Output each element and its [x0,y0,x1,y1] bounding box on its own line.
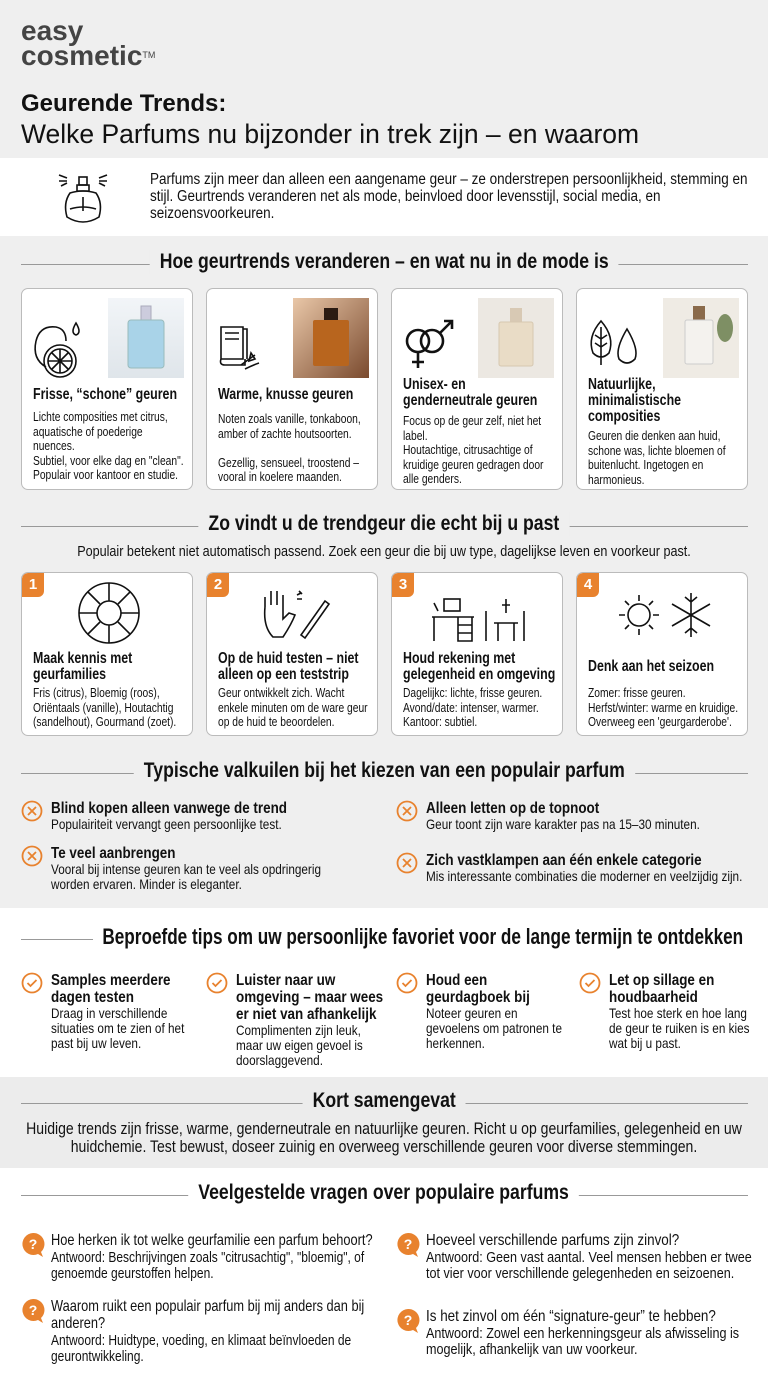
faq 3: ? [404,1236,412,1252]
card: fresh: aquatische of poederige [33,424,143,438]
tip 1 [22,972,184,1051]
tip 3: geurdagboek bij [426,989,530,1006]
tip 3 [396,972,562,1051]
faq 2: Waarom ruikt een populair parfum bij mij anders dan bij anderen? [51,1298,364,1332]
tip 2 [206,972,383,1068]
faq 3: Hoeveel verschillende parfums zijn zinvol? [426,1232,679,1249]
section heading: summary: Kort samengevat [312,1089,456,1112]
pitfall 1 [22,800,287,832]
pitfall 3: Geur toont zijn ware karakter pas na 15–30 minuten. [426,816,700,832]
card: fresh: Subtiel, voor elke dag en "clean". [33,452,184,468]
panel: trend cards [21,288,748,490]
tip 4 [580,972,750,1051]
section heading: FAQ: Veelgestelde vragen over populaire parfums [199,1181,569,1204]
card: natural: Natuurlijke, [588,376,656,393]
card: unisex: Unisex- en [403,376,466,393]
tips band [0,908,768,1077]
card: fresh: Populair voor kantoor en studie. [33,467,178,482]
step 2: alleen op een teststrip [218,666,349,683]
tip 3: Noteer geuren en gevoelens om patronen te herkennen. [426,1005,562,1051]
pitfall 2 [22,845,321,892]
pitfall 3: Alleen letten op de topnoot [426,800,599,817]
step 2 [206,572,378,736]
title: Geurende Trends: [21,90,226,117]
card: warm: Warme, knusse geuren [218,386,353,403]
step 3: Dagelijkc: lichte, frisse geuren. [403,685,542,700]
card: unisex: Houtachtige, citrusachtige of kruidige geuren gedragen door alle genders. [403,442,543,486]
pitfall 1: Blind kopen alleen vanwege de trend [51,800,287,817]
summary band [0,1077,768,1168]
faq 4: Is het zinvol om één “signature-geur” te hebben? [426,1308,716,1325]
panel: pitfalls [22,800,742,892]
step 3: gelegenheid en omgeving [403,666,555,683]
subtitle: Populair betekent niet automatisch passend. Zoek een geur die bij uw type, dagelijkse leven en voorkeur past. [77,543,691,560]
faq 1: ? [29,1236,37,1252]
intro band [0,158,768,236]
card: unisex [391,288,563,490]
tip 4: Let op sillage en houdbaarheid [609,972,714,1006]
icon: perfume bottle [58,174,108,223]
tip 2: Complimenten zijn leuk, maar uw eigen gevoel is doorslaggevend. [236,1022,363,1068]
faq 3 [397,1232,752,1282]
section heading: trends: Hoe geurtrends veranderen – en wat nu in de mode is [160,250,608,273]
pitfall 1: Populairiteit vervangt geen persoonlijke test. [51,816,282,832]
faq 2: Antwoord: Huidtype, voeding, en klimaat beïnvloeden de geurontwikkeling. [51,1332,351,1365]
step 1: 1 [29,576,37,593]
step 3: Kantoor: subtiel. [403,714,477,729]
step 2: Op de huid testen – niet [218,650,359,667]
section heading: pitfalls: Typische valkuilen bij het kiezen van een populair parfum [143,759,624,782]
summary text: Huidige trends zijn frisse, warme, genderneutrale en natuurlijke geuren. Richt u op geurfamilies, gelegenheid en uw huidchemie. Test bewust, doseer zuinig en overweeg verschillende geuren voor diverse stemmingen. [26,1120,742,1156]
card: natural: minimalistische [588,392,681,409]
step 4: Zomer: frisse geuren. [588,685,686,700]
step 1: Maak kennis met [33,650,132,667]
card: warm [206,288,378,490]
header band [0,0,768,158]
section heading: find: Zo vindt u de trendgeur die echt bij u past [209,512,559,535]
pitfall 4 [396,852,742,884]
pitfall 2: Te veel aanbrengen [51,845,175,862]
card: fresh [21,288,193,490]
pitfall 4: Zich vastklampen aan één enkele categorie [426,852,702,869]
faq 2: ? [29,1302,37,1318]
faq 3: Antwoord: Geen vast aantal. Veel mensen hebben er twee tot vier voor verschillende gelegenheden en seizoenen. [426,1249,752,1282]
card: fresh: nuences. [33,438,75,453]
title: Welke Parfums nu bijzonder in trek zijn – en waarom [21,119,639,149]
step 1: Fris (citrus), Bloemig (roos), Oriëntaals (vanille), Houtachtig (sandelhout), Gourmand (zoet). [33,685,176,729]
step 4: Herfst/winter: warme en kruidige. [588,700,738,714]
faq 4 [397,1308,739,1358]
tip 1: Samples meerdere dagen testen [51,972,171,1006]
card: fresh: Lichte composities met citrus, [33,409,168,424]
faq 1: Hoe herken ik tot welke geurfamilie een parfum behoort? [51,1232,373,1249]
tip 3: Houd een [426,972,487,989]
pitfall 2: Vooral bij intense geuren kan te veel als opdringerig worden ervaren. Minder is eleganter. [51,861,321,892]
faq 4: ? [404,1312,412,1328]
step 2: Geur ontwikkelt zich. Wacht enkele minuten om de ware geur op de huid te beoordelen. [218,685,368,729]
faq 1 [22,1232,373,1282]
FAQ band [0,1168,768,1376]
card: unisex: genderneutrale geuren [403,392,537,409]
card: warm: Noten zoals vanille, tonkaboon, amber of zachte houtsoorten. [218,411,361,440]
tip 4: Test hoe sterk en hoe lang de geur te ruiken is en kies wat bij u past. [609,1005,750,1051]
card: natural: Geuren die denken aan huid, schone was, lichte bloemen of buitenlucht. Ingetogen en harmonieus. [588,428,726,486]
step 3: Avond/date: intenser, warmer. [403,700,539,714]
faq 2 [22,1298,364,1365]
pitfall 4: Mis interessante combinaties die moderner en veelzijdig zijn. [426,868,742,884]
logo: easy [21,15,83,46]
step 3: Houd rekening met [403,650,515,667]
card: warm: Gezellig, sensueel, troostend – vooral in koelere maanden. [218,454,359,484]
card: fresh: Frisse, “schone” geuren [33,386,177,403]
faq 4: Antwoord: Zowel een herkenningsgeur als afwisseling is mogelijk, afhankelijk van uw voorkeur. [426,1325,739,1358]
step 4 [576,572,748,736]
logo: cosmeticTM [21,40,155,71]
tip 2: Luister naar uw omgeving – maar wees er niet van afhankelijk [236,972,383,1023]
step 4: Overweeg een 'geurgarderobe'. [588,714,732,729]
step 3 [391,572,563,736]
title [21,90,639,149]
logo [21,15,155,71]
step 4: Denk aan het seizoen [588,658,714,675]
step 1 [21,572,193,736]
card: natural: composities [588,408,660,425]
step 4: 4 [584,576,592,593]
card: natural [576,288,748,490]
tip 1: Draag in verschillende situaties om te zien of het past bij uw leven. [51,1005,184,1051]
card: unisex: Focus op de geur zelf, niet het label. [403,413,541,442]
step 1: geurfamilies [33,666,106,683]
section heading: tips: Beproefde tips om uw persoonlijke favoriet voor de lange termijn te ontdekken [102,924,743,949]
faq 1: Antwoord: Beschrijvingen zoals "citrusachtig", "bloemig", of genoemde geurstoffen helpen. [51,1249,364,1282]
step 3: 3 [399,576,407,593]
intro text: Parfums zijn meer dan alleen een aangename geur – ze onderstrepen persoonlijkheid, stemming en stijl. Geurtrends veranderen net als mode, beinvloed door levensstijl, social media, en seizoensvoorkeuren. [150,171,747,222]
panel: steps [21,572,748,736]
pitfall 3 [396,800,700,832]
step 2: 2 [214,576,222,593]
